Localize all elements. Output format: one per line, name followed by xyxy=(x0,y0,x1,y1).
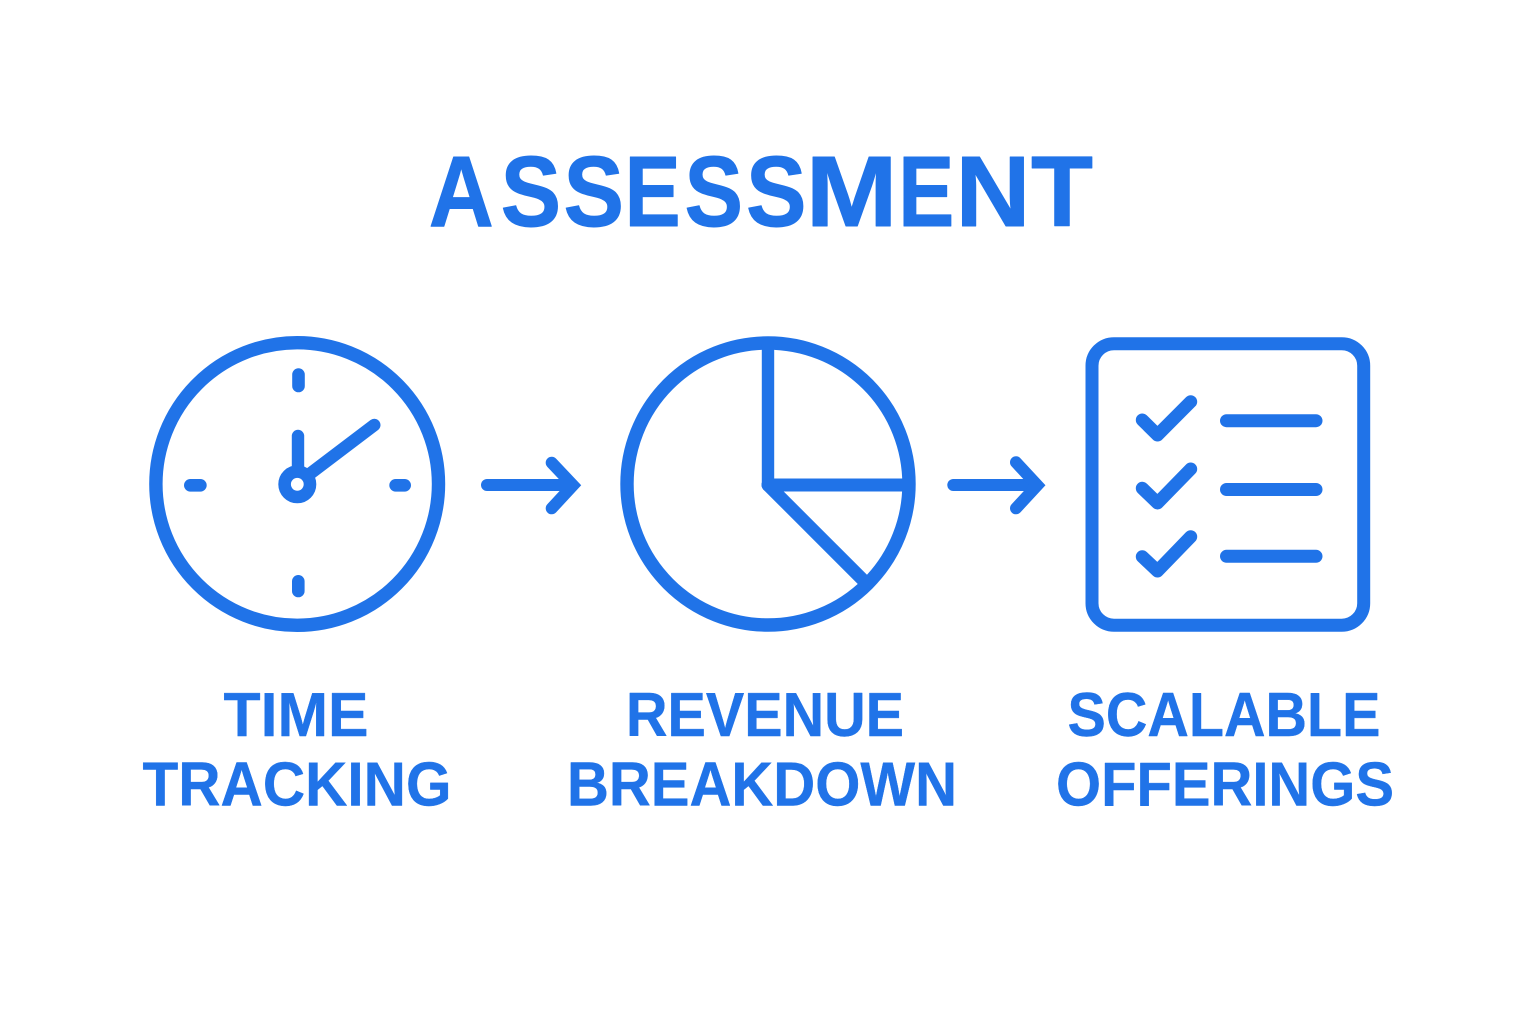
title: S xyxy=(684,136,743,248)
icon: clock xyxy=(156,343,438,625)
label: revenue breakdown: BREAKDOWN xyxy=(567,750,957,819)
title: S xyxy=(501,136,561,248)
title: S xyxy=(564,136,624,248)
label: scalable offerings: OFFERINGS xyxy=(1056,750,1394,819)
title: A xyxy=(429,136,494,248)
title: S xyxy=(746,136,806,248)
arrow: clock to pie xyxy=(487,463,573,508)
title: M xyxy=(806,136,898,248)
label: revenue breakdown: REVENUE xyxy=(626,681,904,750)
title: E xyxy=(898,136,954,248)
icon: checklist xyxy=(1092,344,1364,625)
label: time tracking: TRACKING xyxy=(142,750,452,819)
label: time tracking xyxy=(142,681,452,819)
label: time tracking: TIME xyxy=(224,681,368,750)
icon: pie chart xyxy=(627,343,909,625)
title: N xyxy=(956,136,1030,248)
arrow: pie to checklist xyxy=(953,462,1037,508)
title: E xyxy=(625,136,681,248)
label: scalable offerings: SCALABLE xyxy=(1068,681,1380,750)
label: scalable offerings xyxy=(1056,681,1394,819)
label: revenue breakdown xyxy=(567,681,957,819)
title: T xyxy=(1031,136,1093,248)
